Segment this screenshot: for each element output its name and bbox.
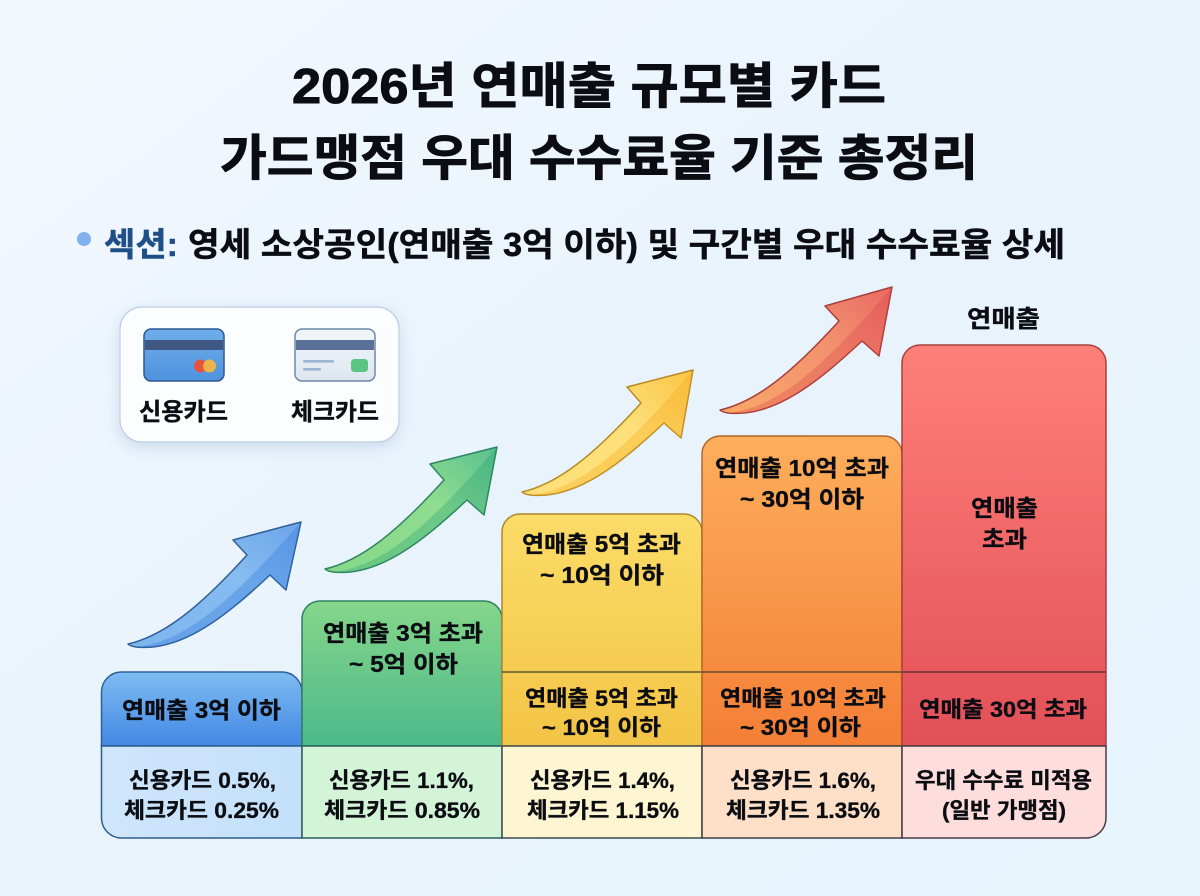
column: 300M to 500M won — [302, 601, 502, 838]
column: up to 300M won: 체크카드 0.25% — [124, 798, 279, 823]
section heading: 섹션: — [104, 226, 178, 263]
column: 500M to 1B won: 연매출 5억 초과 — [522, 531, 681, 557]
panel: card legend — [120, 307, 399, 442]
title: 가드맹점 우대 수수료율 기준 총정리 — [220, 132, 978, 186]
column: up to 300M won — [102, 672, 302, 838]
column: 1B to 3B won: ~ 30억 이하 — [740, 715, 861, 740]
label: credit card: 신용카드 — [139, 399, 228, 426]
column: 1B to 3B won — [702, 436, 902, 838]
column: 500M to 1B won: 체크카드 1.15% — [527, 798, 679, 823]
column: 500M to 1B won: ~ 10억 이하 — [540, 562, 664, 588]
column: up to 300M won: 신용카드 0.5%, — [129, 768, 276, 793]
column: 300M to 500M won: ~ 5억 이하 — [349, 651, 458, 677]
column: 1B to 3B won: 체크카드 1.35% — [726, 798, 880, 823]
column: 1B to 3B won: 신용카드 1.6%, — [730, 768, 876, 793]
column: 500M to 1B won: 신용카드 1.4%, — [530, 768, 675, 793]
icon: credit card — [144, 329, 224, 381]
column: over 3B won: (일반 가맹점) — [942, 798, 1066, 823]
arrow: red — [720, 287, 892, 413]
title — [220, 60, 978, 186]
arrow: blue — [128, 522, 301, 647]
column: over 3B won: 연매출 — [971, 495, 1038, 521]
column: 300M to 500M won: 연매출 3억 초과 — [323, 620, 483, 646]
arrow: yellow — [522, 370, 693, 495]
column: 500M to 1B won — [502, 514, 702, 838]
column: 1B to 3B won: ~ 30억 이하 — [740, 486, 864, 512]
title: 2026년 연매출 규모별 카드 — [292, 60, 886, 114]
column: over 3B won: 연매출 30억 초과 — [919, 697, 1087, 722]
column: 500M to 1B won: 연매출 5억 초과 — [525, 686, 678, 711]
column: over 3B won — [902, 345, 1106, 838]
column: over 3B won: 우대 수수료 미적용 — [915, 768, 1092, 793]
column: 300M to 500M won: 신용카드 1.1%, — [329, 768, 474, 793]
column: 300M to 500M won: 체크카드 0.85% — [324, 798, 480, 823]
column: 500M to 1B won: ~ 10억 이하 — [542, 715, 661, 740]
column: 1B to 3B won: 연매출 10억 초과 — [715, 455, 889, 481]
icon: check card — [295, 329, 375, 381]
label: check card: 체크카드 — [291, 399, 379, 426]
column: 1B to 3B won: 연매출 10억 초과 — [720, 686, 886, 711]
arrow: green — [325, 447, 497, 572]
heading above red column: 연매출 — [967, 306, 1040, 333]
column: up to 300M won: 연매출 3억 이하 — [122, 697, 281, 723]
section heading: 영세 소상공인(연매출 3억 이하) 및 구간별 우대 수수료율 상세 — [188, 226, 1065, 263]
column: over 3B won: 초과 — [982, 526, 1027, 552]
